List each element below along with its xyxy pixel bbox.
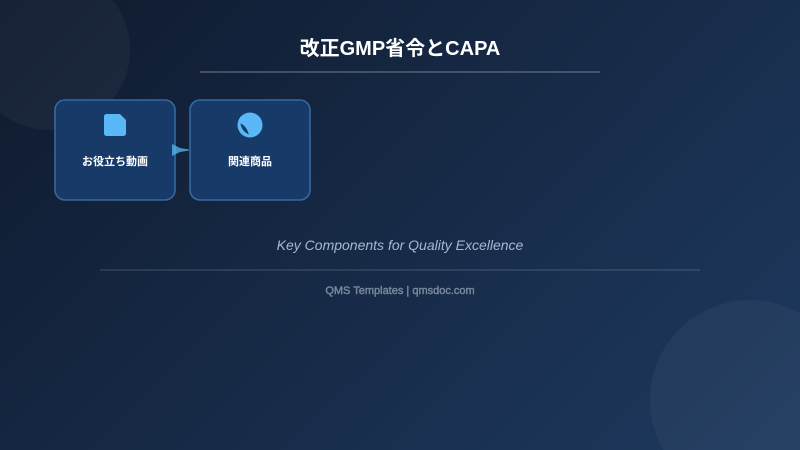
card background — [189, 99, 311, 201]
icon: disc with leaf — [238, 112, 262, 138]
icon: document — [104, 114, 126, 136]
card background — [54, 99, 176, 201]
panel: helpful videos — [54, 99, 176, 201]
title: 改正GMP省令とCAPA — [300, 38, 500, 60]
label: related products: 関連商品 — [228, 156, 272, 168]
footer credit: QMS Templates | qmsdoc.com — [325, 285, 475, 297]
arrow: connector — [172, 144, 189, 156]
label: helpful videos: お役立ち動画 — [82, 156, 148, 168]
title underline — [200, 71, 600, 73]
panel: related products — [189, 99, 311, 201]
footer divider — [100, 269, 700, 271]
subtitle: Key Components for Quality Excellence — [277, 237, 523, 253]
